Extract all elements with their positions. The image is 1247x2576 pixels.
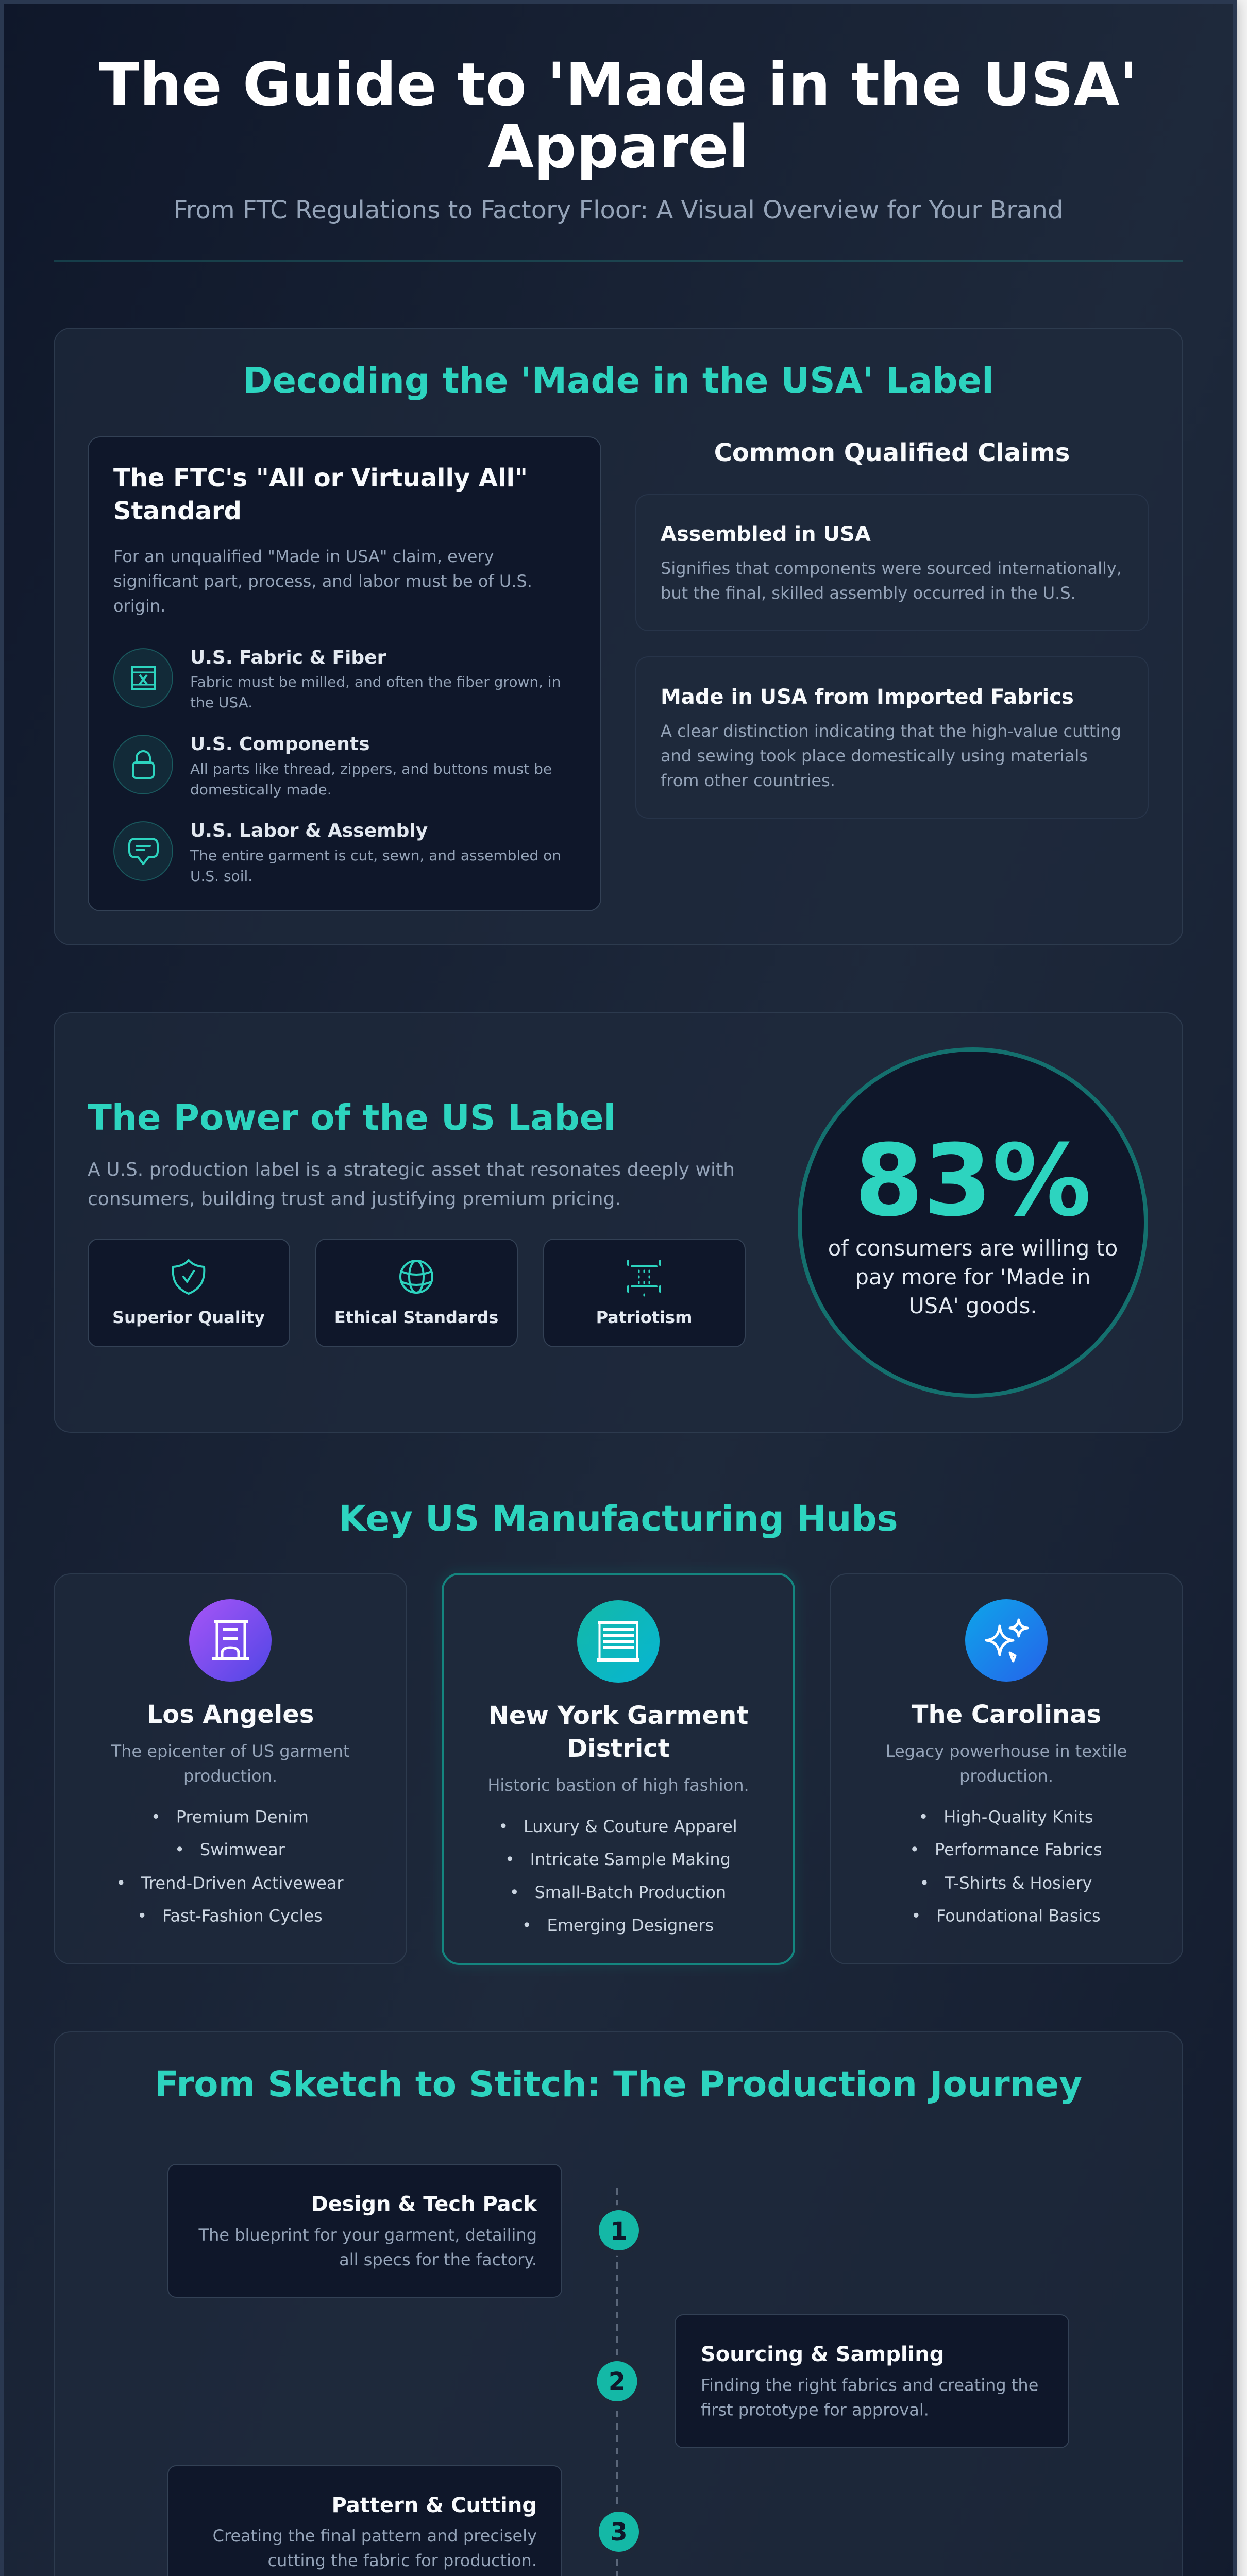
card description: significant part, process, and labor must be of U.S. [113, 571, 532, 591]
step description: all specs for the factory. [339, 2250, 537, 2269]
item description: U.S. soil. [190, 868, 252, 885]
item: labor [114, 820, 561, 885]
icon: fabric [114, 649, 173, 707]
hub list [498, 1817, 737, 1935]
icon: loom [628, 1261, 660, 1296]
hub list: • Foundational Basics [911, 1906, 1101, 1926]
panel: The Carolinas [830, 1574, 1183, 1964]
section heading: hubs: Key US Manufacturing Hubs [339, 1498, 898, 1539]
icon: shield [173, 1260, 204, 1294]
hub list [116, 1807, 344, 1926]
item title: U.S. Labor & Assembly [190, 820, 428, 841]
step number [594, 2506, 644, 2557]
card description: origin. [113, 596, 165, 616]
hub list: • Luxury & Couture Apparel [498, 1817, 737, 1836]
claim title: Made in USA from Imported Fabrics [661, 685, 1074, 709]
card heading: The FTC's "All or Virtually All" [113, 464, 528, 493]
icon: lock [114, 735, 173, 794]
title: Apparel [488, 113, 749, 182]
step title: Design & Tech Pack [311, 2193, 537, 2216]
card description: For an unqualified "Made in USA" claim, every [113, 547, 494, 566]
stat number: 83% [854, 1124, 1091, 1239]
card: made from imported fabrics [636, 657, 1148, 818]
hub title: Los Angeles [147, 1700, 314, 1729]
item description: The entire garment is cut, sewn, and assembled on [190, 847, 561, 864]
hub list: • T-Shirts & Hosiery [920, 1873, 1092, 1893]
claim description: from other countries. [661, 771, 835, 790]
hub list: • Small-Batch Production [510, 1883, 726, 1902]
claim description: and sewing took place domestically using materials [661, 746, 1088, 766]
claim description: A clear distinction indicating that the high-value cutting [661, 721, 1121, 741]
panel: Los Angeles [54, 1574, 407, 1964]
section heading: From Sketch to Stitch: The Production Journey [155, 2064, 1082, 2105]
hub list: • Trend-Driven Activewear [116, 1873, 344, 1893]
hub list: • Performance Fabrics [909, 1840, 1102, 1859]
hub list: • Fast-Fashion Cycles [137, 1906, 323, 1926]
stat caption: of consumers are willing to [828, 1235, 1118, 1261]
hub title: The Carolinas [912, 1700, 1101, 1729]
section heading: The Power of the US Label [88, 1097, 616, 1139]
hub description: Historic bastion of high fashion. [487, 1775, 749, 1795]
step number [594, 2205, 644, 2256]
step number: 2 [609, 2367, 626, 2396]
step 2 [592, 2315, 1069, 2448]
hub list: • Premium Denim [151, 1807, 309, 1827]
label: Patriotism [596, 1308, 692, 1327]
item description: domestically made. [190, 781, 332, 798]
step description: Creating the final pattern and precisely [213, 2526, 537, 2546]
step title: Sourcing & Sampling [701, 2343, 944, 2366]
qualified claims heading: Common Qualified Claims [714, 438, 1070, 467]
item title: U.S. Fabric & Fiber [190, 647, 386, 668]
step number: 1 [610, 2217, 628, 2246]
stat caption: USA' goods. [908, 1293, 1037, 1318]
item description: the USA. [190, 694, 252, 711]
icon: city building [189, 1599, 272, 1682]
icon: garment rack [577, 1600, 660, 1683]
item description: Fabric must be milled, and often the fiber grown, in [190, 673, 561, 690]
description: A U.S. production label is a strategic asset that resonates deeply with [88, 1159, 735, 1180]
claim description: but the final, skilled assembly occurred in the U.S. [661, 583, 1076, 603]
step description: The blueprint for your garment, detailing [198, 2225, 537, 2245]
card: ethical standards [316, 1239, 517, 1347]
hub title: New York Garment [488, 1701, 748, 1730]
step number: 3 [610, 2518, 628, 2547]
panel: production journey [54, 2032, 1183, 2576]
hub description: The epicenter of US garment [111, 1741, 349, 1761]
header [99, 50, 1138, 225]
title: The Guide to 'Made in the USA' [99, 50, 1138, 120]
step number [592, 2356, 642, 2406]
item description: All parts like thread, zippers, and buttons must be [190, 760, 552, 777]
hub list: • Intricate Sample Making [505, 1850, 731, 1869]
step title: Pattern & Cutting [332, 2494, 537, 2517]
hub description: Legacy powerhouse in textile [886, 1741, 1127, 1761]
card: patriotism [544, 1239, 745, 1347]
card: FTC standard [88, 437, 601, 911]
icon: sparkles [965, 1599, 1048, 1682]
item: fabric [114, 647, 561, 711]
hub list [909, 1807, 1102, 1926]
card: assembled in USA [636, 495, 1148, 631]
claim title: Assembled in USA [661, 522, 871, 546]
hub list: • Emerging Designers [522, 1916, 714, 1935]
item title: U.S. Components [190, 734, 370, 755]
stat circle [800, 1049, 1146, 1396]
hub description: production. [959, 1766, 1053, 1786]
label: Superior Quality [112, 1308, 265, 1327]
panel: power of the US label [54, 1013, 1183, 1432]
item: components [114, 734, 552, 798]
icon: speech bubble [114, 822, 173, 880]
card: superior quality [88, 1239, 290, 1347]
subtitle: From FTC Regulations to Factory Floor: A Visual Overview for Your Brand [174, 196, 1063, 225]
panel: New York Garment District [442, 1573, 795, 1964]
hub title: District [567, 1734, 670, 1763]
step 1 [168, 2164, 644, 2297]
icon: globe [400, 1261, 432, 1293]
step description: first prototype for approval. [701, 2400, 929, 2419]
step description: cutting the fabric for production. [268, 2551, 537, 2570]
card heading: Standard [113, 497, 242, 526]
timeline line [616, 2188, 618, 2576]
step description: Finding the right fabrics and creating the [701, 2375, 1038, 2395]
hub description: production. [183, 1766, 277, 1786]
hub list: • Swimwear [175, 1840, 285, 1859]
stat caption: pay more for 'Made in [855, 1264, 1091, 1290]
section heading: Decoding the 'Made in the USA' Label [243, 360, 994, 401]
hub list: • High-Quality Knits [919, 1807, 1093, 1827]
step 3 [168, 2466, 644, 2576]
claim description: Signifies that components were sourced internationally, [661, 558, 1122, 578]
label: Ethical Standards [334, 1308, 498, 1327]
description: consumers, building trust and justifying premium pricing. [88, 1189, 621, 1210]
panel: decoding the label [54, 328, 1183, 945]
